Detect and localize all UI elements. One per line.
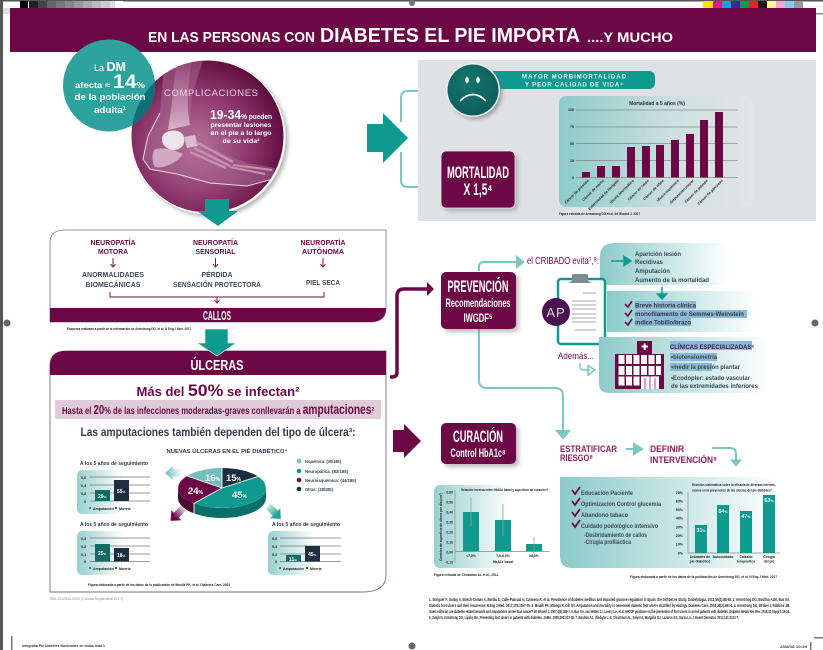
column outcomes: BIOMECÁNICAS xyxy=(86,280,141,289)
pill: mayor morbimortalidad xyxy=(485,71,655,89)
box: mortalidad: MORTALIDAD xyxy=(447,163,509,182)
chart: mortality at 5 years: Mortalidad a 5 años (%) xyxy=(629,101,685,107)
panel: HbA1c chart: 0,20 xyxy=(446,530,453,534)
chart: intervention efficacy: Revisión sistemática sobre la eficacia de diversas interven- xyxy=(692,482,777,487)
panel: HbA1c chart: ≥8,0% xyxy=(529,554,539,558)
box: curación: CURACIÓN xyxy=(453,427,503,446)
text: clinic list: CLÍNICAS ESPECIALIZADAS⁸ xyxy=(670,342,754,351)
heading: riesgo: RIESGO⁸ xyxy=(560,453,593,464)
small chart: isquémica: 55% xyxy=(117,489,126,495)
panel: HbA1c chart: <7,0% xyxy=(466,554,476,558)
chart: mortality at 5 years: Cáncer de mama xyxy=(582,178,605,202)
pill: mayor morbimortalidad: MAYOR MORBIMORTALIDAD xyxy=(522,74,627,80)
chart: mortality at 5 years: 100 xyxy=(568,108,574,112)
pill: mayor morbimortalidad: Y PEOR CALIDAD DE VIDA⁴ xyxy=(525,82,623,88)
panel: HbA1c chart xyxy=(434,485,550,568)
heading: new ulcers: NUEVAS ÚLCERAS EN EL PIÉ DIABÉTICO⁴ xyxy=(166,447,288,455)
checklist: -Cirugía profiláctica xyxy=(584,539,631,546)
checklist xyxy=(572,487,661,546)
text: 19-34% xyxy=(210,107,272,145)
chart: intervention efficacy: 50% xyxy=(676,508,684,512)
band: callos: CALLOS xyxy=(203,308,231,323)
arrow: teal down xyxy=(658,287,666,299)
chart: mortality at 5 years: 75 xyxy=(570,125,574,129)
arrow: down from foot xyxy=(197,199,238,226)
panel: HbA1c chart: 7,0-8,0% xyxy=(496,554,510,558)
arrow: isquémica xyxy=(165,466,183,480)
small chart: isquémica: 0 xyxy=(84,500,86,504)
highlighted checks: monofilamento de Semmes-Weinstein xyxy=(635,311,744,318)
chart: intervention efficacy: 54% xyxy=(718,509,728,515)
small chart: neuroisquémica: A los 5 años de seguimiento xyxy=(80,522,149,528)
panel: HbA1c chart: 0,30 xyxy=(446,520,453,524)
column outcomes: ANORMALIDADES xyxy=(82,270,144,279)
small chart: neuropática: 11% xyxy=(289,557,297,563)
small chart: neuroisquémica: 18% xyxy=(117,553,126,559)
small chart: isquémica: A los 5 años de seguimiento xyxy=(80,461,149,467)
heading: amputation types: Las amputaciones también dependen del tipo de úlcera³: xyxy=(80,427,356,439)
caption: ulcer source: Figura elaborada a partir de los datos de la publicación de Moulik PK, et al. Diabetes Care. 2003 xyxy=(88,583,230,587)
text: clinic list xyxy=(670,341,758,390)
chart: intervention efficacy: 20% xyxy=(676,534,684,538)
column headings: MOTORA xyxy=(98,247,128,256)
panel: ulcers xyxy=(50,329,386,592)
small chart: isquémica: Muerte xyxy=(119,507,131,511)
column headings: AUTÓNOMA xyxy=(302,247,344,256)
teal circle: prevalence: de la población xyxy=(74,92,146,103)
arrow: right big xyxy=(367,113,408,163)
chart: intervention efficacy: Calzado xyxy=(740,555,752,559)
small chart: isquémica: 29% xyxy=(98,494,107,500)
icon: AP badge: AP xyxy=(546,305,566,320)
small chart: neuropática: 45% xyxy=(308,552,317,558)
box: prevención: IWGDF⁵ xyxy=(464,311,492,325)
small chart: neuropática: 0,2 xyxy=(272,553,277,557)
panel: HbA1c chart: 0,10 xyxy=(446,540,453,544)
chart: intervention efficacy: Unidades de xyxy=(690,555,710,559)
text: clinic list: de las extremidades inferiores xyxy=(671,383,758,390)
panel: screening checks xyxy=(607,287,757,332)
pie chart: 16% xyxy=(205,473,221,484)
box: curación xyxy=(441,423,519,467)
chart: mortality at 5 years: Cáncer de riñón xyxy=(643,179,665,201)
chart: mortality at 5 years: 0 xyxy=(572,176,574,180)
heading: 50% infected: Más del 50% se infectan² xyxy=(136,381,300,400)
small chart: isquémica: Amputación xyxy=(93,507,114,511)
references xyxy=(429,597,790,620)
chart: mortality at 5 years: 50 xyxy=(570,142,574,146)
box: mortalidad xyxy=(441,151,518,211)
small chart: neuropática xyxy=(268,522,341,575)
chart: intervention efficacy: 60% xyxy=(676,500,684,504)
chart: intervention efficacy: 31% xyxy=(696,528,706,534)
text: clinic list: •Ecodopler: estado vascular xyxy=(671,375,751,382)
legend: Otras: (28/185) xyxy=(305,487,333,492)
heading: complicaciones: COMPLICACIONES xyxy=(164,88,258,99)
icon: sad face xyxy=(446,63,502,119)
small chart: isquémica: 0,4 xyxy=(81,484,87,488)
header: úlceras: ÚLCERAS xyxy=(190,356,244,374)
highlighted checks xyxy=(625,301,747,326)
list: avoided outcomes: Aumento de la mortalidad xyxy=(635,277,709,284)
title banner xyxy=(10,8,816,52)
box: prevención xyxy=(441,272,519,332)
panel: HbA1c chart: Cambios de superficie de úlcera por día (cm²) xyxy=(439,492,443,561)
legend: Neuroisquémica: (44/185) xyxy=(305,478,356,483)
panel: HbA1c chart: 0,60 xyxy=(446,490,453,494)
highlighted checks: índice Tobillo/brazo xyxy=(635,320,691,326)
pie chart: 15% xyxy=(226,473,242,484)
arrow: callos to úlceras xyxy=(197,329,236,356)
chart: intervention efficacy: 0% xyxy=(678,552,684,556)
connector brackets xyxy=(401,86,441,192)
chart: mortality at 5 years xyxy=(559,96,753,211)
text: cribado: el CRIBADO evita⁷,⁸: xyxy=(527,255,599,267)
chart: intervention efficacy: Autocuidado xyxy=(713,555,733,559)
teal circle: prevalence: adulta¹ xyxy=(94,105,126,116)
text: clinic list: •medir la presión plantar xyxy=(671,364,741,371)
chart: intervention efficacy: ciones en la prevención de las úlceras del pie diabético⁷ xyxy=(692,488,772,492)
arrow: plum to curación xyxy=(393,424,421,458)
list: avoided outcomes xyxy=(635,251,709,284)
chart: mortality at 5 years: Cáncer de páncreas xyxy=(697,179,724,206)
text: además: Además... xyxy=(558,351,594,362)
small chart: neuropática: Amputación xyxy=(283,567,304,571)
arrow: bent down xyxy=(712,448,741,466)
small chart: neuroisquémica: 25% xyxy=(98,551,107,557)
arrow: plum bracket to prevención xyxy=(390,282,434,377)
column outcomes: SENSACIÓN PROTECTORA xyxy=(173,280,262,289)
chart: mortality at 5 years: Cáncer de colon xyxy=(627,179,650,201)
chart: intervention efficacy: 30% xyxy=(676,526,684,530)
small chart: neuropática: 0,4 xyxy=(272,545,278,549)
heading: definir intervención: INTERVENCIÓN⁸ xyxy=(650,454,717,466)
caption: hba1c source: Figura extraída de Christman AL et al., 2011. xyxy=(434,573,499,577)
column headings: NEUROPATÍA xyxy=(193,238,238,247)
small chart: neuroisquémica: 0 xyxy=(84,560,86,564)
icon: hospital xyxy=(615,341,664,389)
checklist: -Desbridamiento de callos xyxy=(584,532,647,539)
text: clinic list: •biotensiometría xyxy=(671,354,717,361)
chart: intervention efficacy: del pie xyxy=(764,560,774,564)
list: avoided outcomes: Recidivas xyxy=(635,259,663,266)
heading: definir intervención: DEFINIR xyxy=(650,444,684,455)
arrow: estratificar to definir xyxy=(626,444,642,454)
column outcomes: PIEL SECA xyxy=(306,278,341,287)
chart: mortality at 5 years: Enfermedad de Hodgkin xyxy=(588,179,620,211)
caption: interventions source: Figura elaborada a partir de los datos de la publicación de Armstrong DG, et al. N Eng J Med. 2017 xyxy=(630,575,777,579)
small chart: neuroisquémica: Muerte xyxy=(119,567,131,571)
chart: intervention efficacy: 47% xyxy=(741,514,752,520)
chart: intervention efficacy: 63% xyxy=(764,498,774,504)
small chart: neuropática: Muerte xyxy=(310,567,322,571)
panel: screening outcomes xyxy=(600,243,730,285)
panel: morbimortality xyxy=(418,60,816,221)
small chart: neuropática: A los 5 años de seguimiento xyxy=(272,522,341,528)
list: avoided outcomes: Aparición lesión xyxy=(635,251,681,258)
legend: Neuropática: (83/185) xyxy=(305,469,348,474)
column headings: NEUROPATÍA xyxy=(90,238,136,247)
icon: clipboard xyxy=(542,274,605,344)
box: prevención: PREVENCIÓN xyxy=(448,277,508,296)
box: curación: Control HbA1c⁸ xyxy=(450,448,506,460)
text: 19-34%: de su vida² xyxy=(222,138,260,145)
column headings: SENSORIAL xyxy=(196,247,236,256)
column outcomes: PÉRDIDA xyxy=(202,270,233,279)
pie chart: 24% xyxy=(188,486,204,497)
checklist: Optimización Control glucemia xyxy=(581,501,661,508)
arrow: además xyxy=(580,363,595,375)
caption: scheme source: Esquema realizado a partir de la información de Armstrong DG, et al. N Eng J Med. 2017. xyxy=(67,327,192,331)
heading: definir intervención xyxy=(650,444,717,466)
text: 19-34%: en el pie a lo largo xyxy=(210,130,272,137)
chart: intervention efficacy: 10% xyxy=(676,542,684,546)
panel: specialised clinics xyxy=(599,337,770,393)
chart: mortality at 5 years: Cáncer de próstata xyxy=(564,178,590,205)
arrow: neuroisquémica xyxy=(166,503,188,526)
chart: intervention efficacy: 40% xyxy=(676,516,684,520)
column headings xyxy=(90,238,346,256)
chart: mortality at 5 years: Úlcera neuropática xyxy=(608,177,635,205)
teal circle: prevalence: La DM xyxy=(94,60,126,74)
legend: Isquémica: (30/185) xyxy=(305,459,341,464)
teal circle: prevalence xyxy=(63,40,155,132)
chart: mortality at 5 years: Úlcera isquémica xyxy=(655,177,680,203)
panel: HbA1c chart: 0,40 xyxy=(446,510,453,514)
small chart: neuroisquémica xyxy=(77,522,150,575)
chart: intervention efficacy: 70% xyxy=(676,491,684,495)
chart: mortality at 5 years: Amputación mayor xyxy=(669,178,695,205)
chart: mortality at 5 years: Cáncer de pulmón xyxy=(684,179,709,204)
title banner: ....Y MUCHO xyxy=(587,29,673,45)
small chart: neuropática: 0,6 xyxy=(272,537,277,541)
panel: HbA1c chart: HbA1c basal xyxy=(493,560,513,564)
pie chart xyxy=(178,468,266,518)
icon: foot x-ray xyxy=(143,58,275,186)
panel: HbA1c chart: Relación inversa entre HbA1c basal y superficie de curación⁹ xyxy=(461,488,548,492)
small chart: isquémica: 0,6 xyxy=(81,476,86,480)
title banner: DIABETES EL PIE IMPORTA xyxy=(320,24,580,47)
title banner: EN LAS PERSONAS CON xyxy=(148,30,315,46)
caption: chart source: Figura extraída de Armstrong DG et al. Int Wound J. 2007 xyxy=(559,212,640,216)
heading: estratificar riesgo: ESTRATIFICAR xyxy=(560,444,617,455)
arrow: neuropática xyxy=(263,501,286,524)
column headings: NEUROPATÍA xyxy=(300,238,346,247)
footer file name: Infografía Pie Diabetes Noviembre en todas.indd 1 xyxy=(22,643,106,648)
panel: HbA1c chart: 0,50 xyxy=(446,500,453,504)
chart: intervention efficacy: terapéutico xyxy=(737,560,755,564)
panel: HbA1c chart: -0,10 xyxy=(445,560,453,564)
legend xyxy=(297,459,356,492)
panel: interventions xyxy=(560,477,780,568)
panel: neuropathies xyxy=(50,230,386,323)
panel: HbA1c chart: 0,00 xyxy=(446,550,453,554)
band: callos xyxy=(50,308,386,323)
checklist: Abandono tabaco xyxy=(581,512,628,519)
box: prevención: Recomendaciones xyxy=(446,298,510,310)
small chart: isquémica xyxy=(77,461,150,514)
box: mortalidad: X 1,5⁴ xyxy=(464,180,492,199)
teal connector from prevención xyxy=(479,257,569,438)
small chart: neuroisquémica: 0,2 xyxy=(81,545,86,549)
chart: intervention efficacy: Cirugía xyxy=(763,555,775,559)
checklist: Cuidado podológico intensivo xyxy=(581,523,658,530)
checklist: Educación Paciente xyxy=(581,490,633,497)
text: 19-34%: 19-34% pueden xyxy=(210,107,272,122)
foot complications circle xyxy=(132,58,288,217)
chart: mortality at 5 years: 25 xyxy=(570,159,574,163)
arrows and bracket xyxy=(110,258,326,303)
chart: intervention efficacy: pie diabético xyxy=(690,560,710,564)
teal circle: prevalence: afecta ≈ 14 % xyxy=(75,72,145,93)
code: document id: 358-1232343-0000 (Creada Septiembre 2017) xyxy=(50,597,123,601)
list: avoided outcomes: Amputación xyxy=(635,268,670,275)
highlighted checks: Breve historia clínica xyxy=(635,302,696,310)
pie chart: 45% xyxy=(232,490,248,501)
small chart: neuroisquémica: 0,1 xyxy=(81,553,86,557)
small chart: isquémica: 0,2 xyxy=(81,492,86,496)
arrow: teal right xyxy=(611,256,631,266)
header: úlceras xyxy=(50,351,386,375)
text: 19-34%: presentar lesiones xyxy=(210,122,272,129)
footer date: 23/8/18 10:39 xyxy=(780,644,808,649)
chart: intervention efficacy xyxy=(676,482,780,564)
band: 20% amputations: Hasta el 20% de las infecciones moderadas-graves conllevarán a amputaciones² xyxy=(62,401,374,417)
small chart: neuroisquémica: 0,3 xyxy=(81,537,86,541)
small chart: neuropática: 0 xyxy=(275,560,277,564)
column outcomes xyxy=(82,270,341,289)
small chart: neuroisquémica: Amputación xyxy=(93,567,114,571)
